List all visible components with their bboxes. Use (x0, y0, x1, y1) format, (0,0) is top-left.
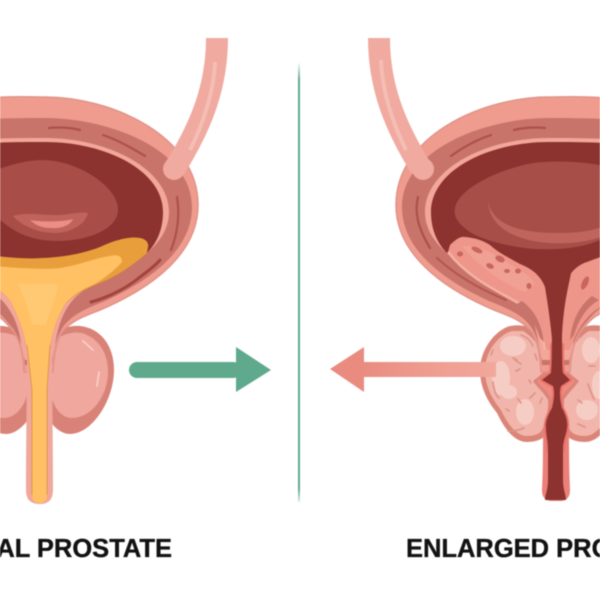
urethra upper channel (543, 268, 572, 335)
prostate tissue highlights (492, 336, 600, 425)
bladder wall muscle stripes (417, 128, 545, 300)
urethra lining behind lobes (534, 330, 578, 438)
normal prostate diagram (0, 38, 217, 504)
urethra red edging (542, 345, 570, 450)
green arrow pointing right (129, 347, 271, 392)
constricted urethra channel (542, 300, 570, 500)
left ureter (163, 38, 217, 180)
right ureter (379, 38, 434, 180)
median prostate lobes pressing into bladder (448, 237, 600, 350)
bladder interior fold (455, 162, 600, 249)
prostate tissue flecks (491, 335, 595, 431)
center divider line (298, 62, 300, 502)
urine (0, 237, 148, 345)
lobe spots (457, 245, 591, 291)
urethra tube (542, 430, 570, 501)
red arrow pointing left (330, 347, 496, 392)
enlarged prostate diagram (379, 38, 600, 501)
enlarged prostate gland lobes (480, 325, 600, 442)
normal prostate gland (0, 326, 114, 434)
bladder wall (396, 97, 600, 372)
bladder wall muscle stripes (49, 128, 178, 302)
urethra (26, 340, 53, 504)
bladder wall (0, 97, 198, 372)
bladder interior fold (0, 160, 118, 241)
